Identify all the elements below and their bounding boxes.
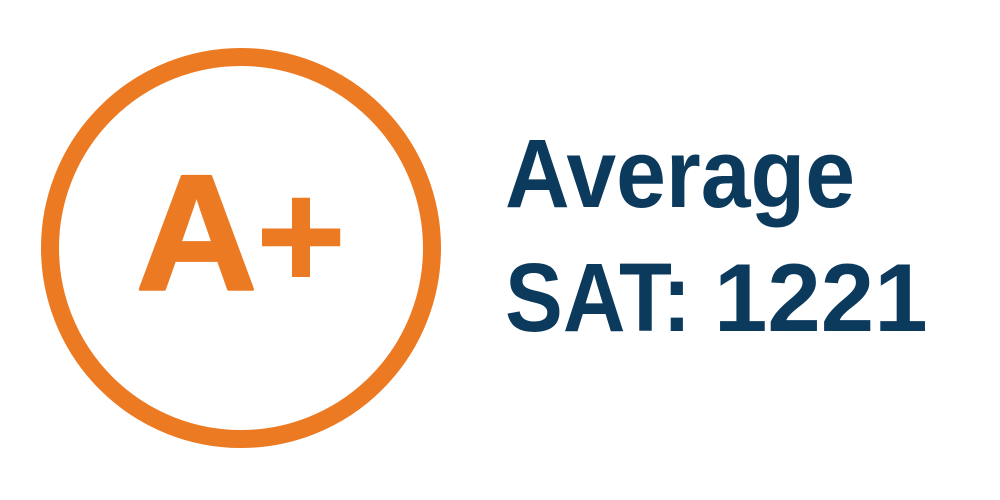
text: Average SAT score xyxy=(505,120,928,352)
plus sign: + xyxy=(256,150,346,322)
circle ring xyxy=(50,57,432,439)
grade letter A: A xyxy=(136,142,257,325)
icon: orange circle with A+ grade xyxy=(50,57,432,439)
label: Average: Average xyxy=(505,120,855,228)
value: SAT 1221 xyxy=(505,245,928,352)
label: SAT: SAT: xyxy=(505,245,691,352)
number: 1221: 1221 xyxy=(714,245,928,352)
